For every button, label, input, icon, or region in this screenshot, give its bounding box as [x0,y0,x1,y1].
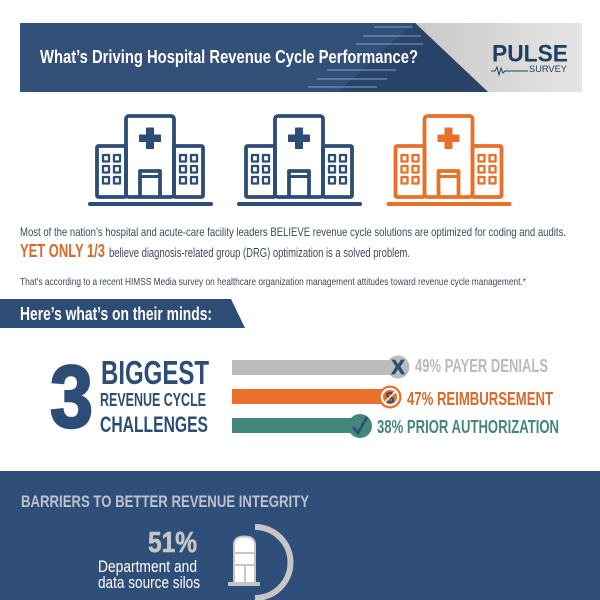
heading: 3 biggest revenue cycle challenges [50,347,209,446]
icon: crossed-out dollar: $ [386,390,395,407]
statistic label: Department and [98,557,197,576]
bar: reimbursement [232,386,553,409]
icon: crossed-out dollar [378,386,402,408]
banner grey background [410,23,582,92]
pulse survey logo: SURVEY [529,64,568,75]
heading: 3 biggest revenue cycle challenges: 3 [50,347,93,446]
icon: hospital 2 [239,116,360,204]
banner title: What’s Driving Hospital Revenue Cycle Performance? [40,47,418,67]
highlighted statistic: YET ONLY 1/3 [20,241,105,261]
statistic label [98,557,200,592]
bar: prior authorization [232,414,559,438]
heading: 3 biggest revenue cycle challenges: BIGGEST [101,354,209,391]
heading: 3 biggest revenue cycle challenges: CHALLENGES [100,412,208,437]
statistic: 51 percent: 51% [148,527,197,559]
icon: hospital 3 orange [388,116,510,204]
icon: hospital 1 [90,116,211,204]
icon: silo door [228,536,260,586]
heading: 3 biggest revenue cycle challenges: REVENUE CYCLE [100,390,206,410]
icon: x [386,356,410,378]
bar: payer denials: 49% PAYER DENIALS [415,356,548,376]
banner navy panel [20,23,488,92]
pulse survey logo: PULSE [492,40,568,68]
section banner [0,299,245,328]
bar: payer denials [232,356,548,379]
header banner [20,23,582,92]
panel: barriers [0,471,600,600]
section banner: Here’s what’s on their minds: [20,304,212,324]
intro text block [20,225,566,288]
bar: payer denials: X [391,357,405,379]
icon: check mark [348,414,372,438]
statistic label: data source silos [98,573,200,592]
intro text block: believe diagnosis-related group (DRG) optimization is a solved problem. [109,246,410,260]
progress arc [255,527,290,598]
barriers heading: BARRIERS TO BETTER REVENUE INTEGRITY [21,492,310,511]
